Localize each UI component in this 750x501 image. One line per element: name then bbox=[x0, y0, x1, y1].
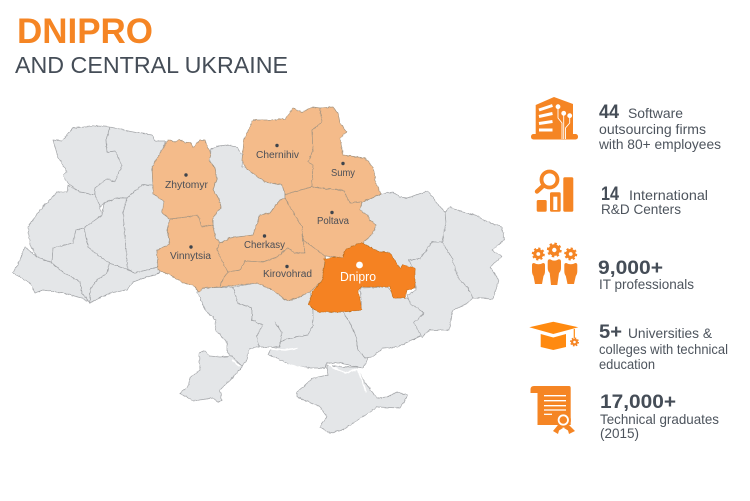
icon: graduation cap bbox=[529, 322, 578, 350]
icon: building with circuit bbox=[531, 97, 578, 140]
stat: IT professionals bbox=[598, 257, 694, 292]
stat: R&D centers: R&D Centers bbox=[601, 201, 681, 217]
label: Vinnytsia bbox=[170, 245, 211, 262]
label: Sumy bbox=[331, 162, 355, 179]
stat: universities: colleges with technical bbox=[599, 341, 728, 357]
stat: universities: 5+ bbox=[599, 321, 622, 343]
label: Dnipro bbox=[340, 262, 376, 284]
region: Sumy bbox=[308, 107, 381, 203]
stat: R&D centers: 14 bbox=[601, 183, 619, 205]
stat: software firms: Software bbox=[628, 105, 683, 121]
icon: people with gears bbox=[532, 244, 577, 285]
stat: software firms bbox=[598, 101, 721, 152]
coastal inlets bbox=[232, 348, 366, 392]
stat: graduates: Technical graduates bbox=[600, 411, 719, 427]
stat: software firms: outsourcing firms bbox=[599, 121, 706, 137]
subtitle: AND CENTRAL UKRAINE bbox=[15, 52, 288, 78]
stat: R&D centers bbox=[601, 183, 708, 217]
stat: IT professionals: 9,000+ bbox=[598, 257, 663, 279]
label: Dnipro: Dnipro bbox=[340, 269, 376, 284]
region: Vinnytsia bbox=[157, 215, 228, 292]
label: Sumy: Sumy bbox=[331, 168, 355, 179]
label: Vinnytsia: Vinnytsia bbox=[170, 251, 211, 262]
stat: software firms: 44 bbox=[599, 101, 619, 123]
title: DNIPRO bbox=[17, 12, 153, 51]
label: Chernihiv: Chernihiv bbox=[256, 150, 299, 161]
region: Chernihiv bbox=[242, 107, 322, 195]
label: Zhytomyr: Zhytomyr bbox=[165, 180, 209, 191]
region: Kirovohrad bbox=[220, 240, 325, 301]
stat: graduates: 17,000+ bbox=[600, 391, 676, 413]
stat: IT professionals: IT professionals bbox=[599, 276, 694, 292]
map of Ukraine bbox=[13, 107, 504, 433]
label: Poltava: Poltava bbox=[317, 216, 349, 227]
region: Poltava bbox=[285, 187, 376, 258]
stat: graduates: (2015) bbox=[600, 425, 639, 441]
region: Zhytomyr bbox=[152, 139, 221, 227]
stat: universities: Universities & bbox=[628, 325, 713, 341]
region: Cherkasy bbox=[217, 198, 305, 272]
map regions bbox=[13, 107, 504, 433]
label: Cherkasy: Cherkasy bbox=[244, 240, 285, 251]
stat: universities bbox=[599, 321, 728, 372]
label: Chernihiv bbox=[256, 144, 299, 161]
stat: graduates bbox=[600, 391, 719, 441]
icon: magnifier and bars bbox=[537, 172, 573, 212]
label: Zhytomyr bbox=[165, 173, 209, 191]
icon: diploma with seal bbox=[530, 386, 575, 434]
label: Cherkasy bbox=[244, 234, 285, 251]
stat: universities: education bbox=[599, 356, 655, 372]
label: Poltava bbox=[317, 211, 349, 227]
grey regions: west, south and east bbox=[13, 126, 504, 433]
stat: R&D centers: International bbox=[629, 187, 708, 203]
stat: software firms: with 80+ employees bbox=[598, 136, 721, 152]
region: Dnipro bbox=[309, 243, 415, 312]
label: Kirovohrad: Kirovohrad bbox=[263, 269, 312, 280]
